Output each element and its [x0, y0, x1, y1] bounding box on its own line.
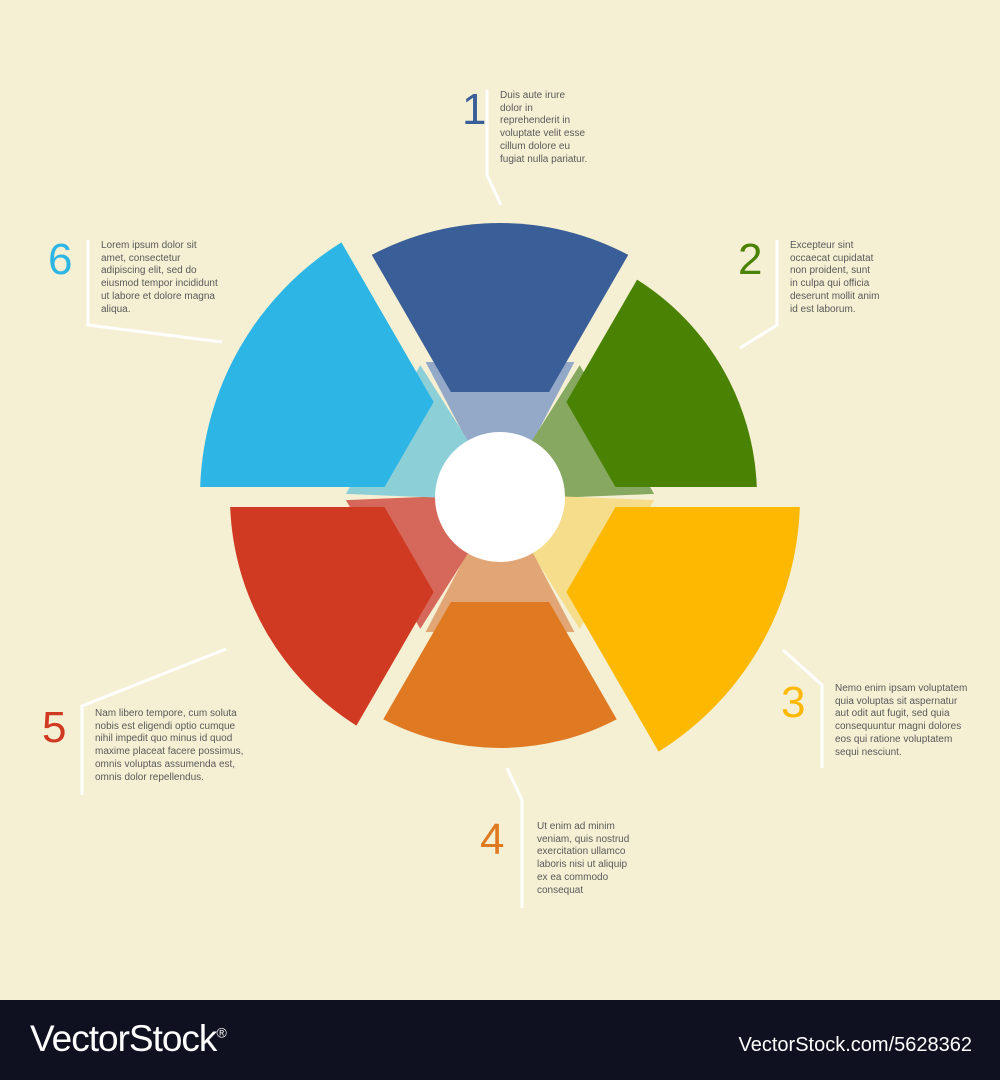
segment 4: orange: [383, 497, 617, 748]
callout 3: aut odit aut fugit, sed quia: [835, 708, 950, 719]
callout 6: aliqua.: [101, 304, 130, 315]
callout 1: 1: [462, 85, 486, 134]
segment 3: yellow: [429, 375, 830, 769]
callout 5: maxime placeat facere possimus,: [95, 746, 243, 757]
callout 1: voluptate velit esse: [500, 128, 585, 139]
callout 4: 4: [480, 815, 504, 864]
callout 5: 5: [42, 703, 66, 752]
callout 2: [738, 235, 879, 315]
callout 4: consequat: [537, 885, 583, 896]
callout 4: ex ea commodo: [537, 872, 608, 883]
callout 5: omnis voluptas assumenda est,: [95, 759, 235, 770]
callout 5: Nam libero tempore, cum soluta: [95, 708, 237, 719]
footer bar: [0, 1000, 1000, 1080]
callout 3: [781, 678, 967, 758]
callout 6: [48, 235, 218, 315]
callout 1: fugiat nulla pariatur.: [500, 154, 587, 165]
callout 3: sequi nesciunt.: [835, 747, 902, 758]
callout 3: consequuntur magni dolores: [835, 721, 961, 732]
callout 2: Excepteur sint: [790, 240, 853, 251]
segment 2: green: [440, 265, 782, 601]
callout 5: nobis est eligendi optio cumque: [95, 721, 235, 732]
callout 6: 6: [48, 235, 72, 284]
segment 5: red: [203, 388, 563, 741]
callout 3: eos qui ratione voluptatem: [835, 734, 952, 745]
callout 5: [42, 703, 243, 783]
callout 4: laboris nisi ut aliquip: [537, 859, 627, 870]
callout 6: adipiscing elit, sed do: [101, 265, 197, 276]
callout 1: Duis aute irure: [500, 90, 565, 101]
callout 5: nihil impedit quo minus id quod: [95, 733, 232, 744]
callout 2: non proident, sunt: [790, 265, 870, 276]
callout 6: amet, consectetur: [101, 253, 180, 264]
callout 2: deserunt mollit anim: [790, 291, 879, 302]
callout lines: [82, 90, 822, 908]
segment 1: blue: [372, 223, 628, 497]
callout 6: ut labore et dolore magna: [101, 291, 215, 302]
callout 6: Lorem ipsum dolor sit: [101, 240, 197, 251]
callout 5: omnis dolor repellendus.: [95, 772, 204, 783]
callout 1: [462, 85, 587, 165]
callout 3: Nemo enim ipsam voluptatem: [835, 683, 967, 694]
footer url: VectorStock.com/5628362: [739, 1034, 972, 1056]
callout 3: 3: [781, 678, 805, 727]
callout 2: in culpa qui officia: [790, 278, 869, 289]
callout 1: dolor in: [500, 103, 533, 114]
callout 6: eiusmod tempor incididunt: [101, 278, 218, 289]
callout 4: Ut enim ad minim: [537, 821, 615, 832]
callout 3: quia voluptas sit aspernatur: [835, 696, 957, 707]
callout 1: cillum dolore eu: [500, 141, 570, 152]
callout 2: 2: [738, 235, 762, 284]
callout 2: occaecat cupidatat: [790, 253, 873, 264]
center white circle: [435, 432, 565, 562]
callout 2: id est laborum.: [790, 304, 856, 315]
callout 4: veniam, quis nostrud: [537, 834, 629, 845]
callout 4: [480, 815, 629, 896]
segment 6: cyan: [170, 225, 571, 619]
footer logo: VectorStock®: [30, 1018, 226, 1059]
callout 4: exercitation ullamco: [537, 846, 625, 857]
callout 1: reprehenderit in: [500, 115, 570, 126]
